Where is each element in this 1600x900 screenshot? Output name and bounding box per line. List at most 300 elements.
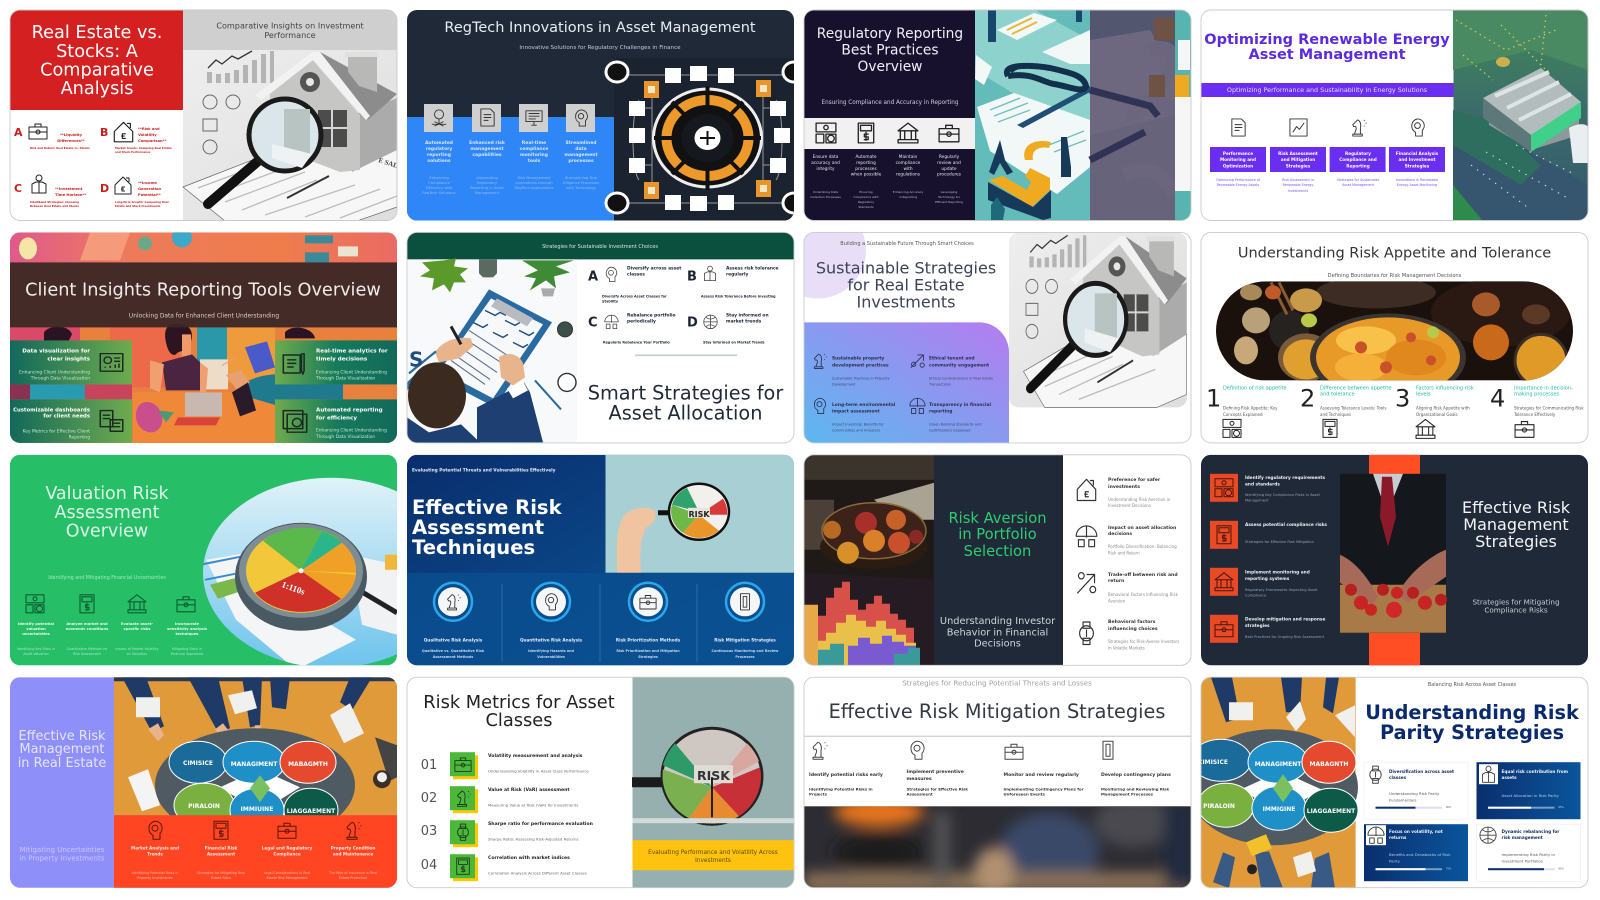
- step 3: 3: [1395, 384, 1410, 412]
- item 1: Understanding Risk Aversion in: [1108, 497, 1171, 502]
- item A: Risk and Return: Real Estate vs. Stocks: [30, 146, 90, 150]
- notes: Strategies for Sustainable: [1337, 178, 1379, 182]
- title: Best Practices: [841, 42, 939, 58]
- title: Stocks: A: [56, 42, 138, 62]
- item 2: decisions: [1108, 531, 1132, 537]
- title: Analysis: [61, 79, 133, 99]
- column 2: Identifying Hazards and: [528, 649, 575, 653]
- item C: Rebalance portfolio: [627, 312, 676, 318]
- box labels: Financial Analysis: [1396, 151, 1439, 156]
- box labels: Reporting: [1346, 164, 1370, 168]
- tile 1: Fundamentals: [1389, 798, 1416, 803]
- step 1: Projects: [809, 792, 828, 797]
- item A: Stability: [602, 299, 619, 303]
- column headings: Property Condition: [331, 846, 375, 851]
- column 2: capabilities: [472, 152, 502, 158]
- box: automated reporting: [275, 399, 397, 443]
- column 3: [515, 104, 554, 190]
- meeting table photo: CIMISICE: [183, 760, 213, 767]
- column 4: Risk Mitigation Strategies: [714, 637, 776, 642]
- column headings: Trends: [147, 852, 163, 857]
- column 3: Risk Prioritization Methods: [616, 637, 681, 642]
- column notes: on Valuation: [127, 652, 147, 656]
- card: Sustainable Strategies for Real Estate: [770, 202, 1191, 443]
- magnifier illustration: [200, 475, 400, 670]
- dark title band: [10, 262, 397, 327]
- icons: [149, 821, 361, 839]
- subtitle: Mitigating Uncertainties: [20, 845, 105, 854]
- step 3: Aligning Risk Appetite with: [1416, 405, 1470, 410]
- box labels: Monitoring and: [1220, 157, 1256, 162]
- icons: [26, 595, 195, 613]
- step 4: Monitoring and Reviewing Risk: [1101, 787, 1170, 792]
- tile 1: Understanding Risk Parity: [1389, 791, 1440, 796]
- tile 4: risk management: [1502, 835, 1543, 840]
- column 3: [616, 583, 681, 659]
- item D: Stay Informed on Market Trends: [703, 340, 765, 344]
- column 3: compliance: [520, 146, 548, 152]
- step 4: 4: [1490, 384, 1505, 412]
- box: customizable dashboards: Reporting: [69, 434, 90, 440]
- card: Effective Risk Assessment Techniques: [407, 455, 794, 666]
- step 3: [1004, 744, 1084, 797]
- column headings: integrity: [816, 166, 835, 172]
- subtitle: Decisions: [974, 638, 1021, 649]
- column notes: Identifying Potential Risks in: [132, 871, 178, 875]
- box labels: Optimization: [1223, 164, 1253, 168]
- column notes: Risk Assessment: [73, 652, 102, 656]
- column notes: Underlining Data: [813, 190, 838, 194]
- column notes: Regulatory: [858, 200, 874, 204]
- tile 3: Parity: [1389, 859, 1401, 864]
- step 2: Assessing Tolerance Levels: Tools: [1320, 405, 1386, 410]
- subtitle: Evaluating Potential Threats and Vulnerabilities Effectively: [412, 467, 556, 473]
- row 02: Measuring Value at Risk (VaR) for Investments: [488, 803, 578, 808]
- item D: **Income: [138, 181, 157, 185]
- card: Valuation Risk Assessment: [10, 455, 400, 670]
- item 3: [1077, 572, 1179, 603]
- title: Understanding Risk Appetite and Tolerance: [1238, 245, 1551, 261]
- item D: [100, 177, 169, 208]
- tile 2: Asset Allocation in Risk Parity: [1502, 793, 1560, 798]
- column 2: management: [470, 146, 505, 152]
- orange strip: [1369, 455, 1420, 666]
- step 3: Unforeseen Events: [1004, 792, 1046, 797]
- row 02: Value at Risk (VaR) assessment: [488, 787, 570, 793]
- title: Techniques: [412, 536, 535, 559]
- item A: A: [14, 126, 23, 139]
- box: data visualization: Data visualization for: [22, 348, 90, 354]
- step 4: [1101, 741, 1171, 797]
- item 1: Identify regulatory requirements: [1245, 475, 1325, 481]
- item 3: [1210, 568, 1318, 597]
- title: Asset Management: [1248, 47, 1406, 63]
- tile 3: Benefits and Drawbacks of Risk: [1389, 852, 1451, 857]
- tile 2: assets: [1502, 775, 1517, 780]
- risk gauge photo: RISK: [697, 768, 731, 783]
- column 2: Automating: [476, 176, 498, 180]
- magnifier illustration: 1:110s: [280, 579, 307, 597]
- box: real-time analytics: timely decisions: [316, 356, 368, 362]
- column headings: processes: [855, 166, 877, 172]
- purple boxes: [1210, 147, 1445, 172]
- column notes: Quantitative Methods for: [66, 647, 108, 651]
- risk photo: [606, 455, 794, 573]
- meeting table photo: CIMISICE: [1198, 759, 1228, 766]
- item 1: Identifying Key Compliance Risks in Asset: [1245, 493, 1321, 497]
- item A: [14, 124, 90, 150]
- item A: [588, 265, 681, 303]
- title: Overview: [66, 521, 148, 541]
- box: real-time analytics: Through Data Visualization: [315, 375, 375, 381]
- yellow callout: Investments: [695, 858, 731, 864]
- notes: Energy Asset Monitoring: [1397, 183, 1437, 187]
- column notes: Property Investments: [137, 876, 173, 880]
- column 1: regulatory: [426, 146, 452, 152]
- column headings: specific risks: [124, 627, 151, 631]
- column 1: Enhancing: [429, 176, 449, 180]
- item 2: Risk and Return: [1108, 550, 1140, 555]
- item D: D: [687, 315, 698, 330]
- suit photo: [1340, 474, 1447, 633]
- card: Understanding Risk Parity Strategies: [1188, 677, 1588, 888]
- title: Selection: [964, 543, 1031, 560]
- column headings: valuation: [26, 627, 46, 631]
- item 3: Regulatory Frameworks Impacting Asset: [1245, 588, 1318, 592]
- step 4: Develop contingency plans: [1101, 772, 1171, 778]
- title: Optimizing Renewable Energy: [1204, 32, 1450, 48]
- item C: C: [14, 182, 22, 195]
- column headings: Ensure data: [813, 154, 839, 160]
- item 1: Investment Decisions: [1108, 503, 1151, 508]
- dark centre panel: [934, 455, 1063, 666]
- title: Effective Risk: [18, 729, 106, 744]
- item C: periodically: [627, 318, 656, 324]
- tile 2: [1476, 762, 1580, 819]
- item A: classes: [627, 271, 645, 277]
- risk gauge photo: [632, 677, 794, 888]
- notes: [1216, 178, 1438, 192]
- item C: Regularly Rebalance Your Portfolio: [603, 340, 670, 344]
- column 3: Real-time: [522, 140, 546, 146]
- column 1: Efficiency with: [426, 186, 453, 190]
- notes: Renewable Energy: [1283, 183, 1313, 187]
- step 1: Identify potential risks early: [809, 772, 883, 778]
- step 3: Organizational Goals: [1416, 412, 1458, 417]
- icon strip: [804, 118, 975, 149]
- column notes: Estate Risk Management: [266, 876, 308, 880]
- row 03: Sharpe Ratio: Assessing Risk-Adjusted Returns: [488, 837, 579, 842]
- panel item 2: [911, 355, 993, 386]
- meeting table photo: PIRALOIN: [1203, 803, 1235, 810]
- row 02: [421, 786, 578, 813]
- subtitle: Building a Sustainable Future Through Smart Choices: [840, 241, 974, 247]
- card: Risk Aversion in Portfolio Selection: [804, 455, 1191, 666]
- box: real-time analytics: Real-time analytics for: [316, 348, 388, 354]
- column notes: The Role of Insurance in Real: [328, 871, 377, 875]
- title: in Portfolio: [958, 526, 1037, 543]
- column 4: [563, 104, 599, 190]
- item 4: strategies: [1245, 623, 1270, 629]
- column headings: review and: [937, 160, 961, 166]
- row 01: Understanding Volatility in Asset Class Performance: [488, 769, 589, 774]
- icons: [1232, 119, 1424, 136]
- item 2: [1210, 521, 1327, 549]
- column headings: Assessment: [207, 852, 235, 857]
- step 3: Monitor and review regularly: [1004, 772, 1079, 778]
- card: Understanding Risk Appetite: [1201, 232, 1588, 443]
- item D: Generation: [138, 187, 162, 191]
- box: real-time analytics: [275, 340, 397, 384]
- item 4: influencing choices: [1108, 626, 1158, 632]
- title: Real Estate vs.: [32, 23, 162, 43]
- card: Regulatory Reporting Best Practices: [804, 10, 1191, 221]
- item B: B: [100, 126, 108, 139]
- title: Regulatory Reporting: [817, 26, 963, 42]
- tile 3: [1364, 824, 1468, 881]
- title: RegTech Innovations in Asset Management: [444, 20, 756, 36]
- column headings: regulations: [896, 172, 921, 178]
- column 4: Diligence Processes: [563, 181, 599, 185]
- item B: [100, 122, 172, 154]
- item 4: Behavioral factors: [1108, 619, 1156, 625]
- column headings: Evaluate asset-: [121, 622, 153, 626]
- column 1: solutions: [427, 158, 451, 164]
- meeting table photo: LIAGGAEMENT: [1307, 808, 1356, 815]
- title: for Real Estate: [847, 275, 965, 294]
- card: Optimizing Renewable Energy: [1201, 10, 1588, 221]
- column headings: and Maintenance: [333, 852, 373, 857]
- divider: [635, 354, 737, 356]
- panel item 4: Certifications Explained: [929, 428, 970, 432]
- column headings: reporting: [856, 160, 876, 166]
- column headings: sensitivity analysis: [167, 627, 208, 631]
- house photo: E SAL: [377, 156, 399, 170]
- step 3: Factors influencing risk: [1416, 385, 1474, 391]
- step 4: making processes: [1514, 391, 1559, 397]
- column notes: [132, 871, 377, 880]
- house photo: [183, 50, 399, 221]
- column 4: management: [564, 152, 599, 158]
- colourful illustration: [10, 227, 397, 443]
- title: Risk Metrics for Asset: [423, 692, 615, 713]
- tile 4: Investment Portfolios: [1502, 859, 1543, 864]
- item D: Long-Term Growth: Comparing Real: [115, 200, 169, 204]
- column 1: Automated: [425, 140, 453, 146]
- column notes: Enhancing Accuracy: [893, 190, 923, 194]
- item 3: Aversion: [1108, 598, 1126, 603]
- red title panel: [10, 10, 183, 110]
- column notes: Identifying Key Risks in: [17, 647, 55, 651]
- box: data visualization: Enhancing Client Understanding: [19, 369, 90, 375]
- card: Effective Risk Management in Real Estate: [10, 677, 397, 888]
- step 3: [1395, 384, 1474, 438]
- column 4: Continuous Monitoring and Review: [712, 649, 779, 653]
- notes: Risk Assessment in: [1282, 178, 1314, 182]
- title: Overview: [858, 59, 922, 75]
- title: Understanding Risk: [1365, 701, 1580, 724]
- step 2: Strategies for Effective Risk: [906, 787, 968, 792]
- step 2: Difference between appetite: [1320, 385, 1391, 391]
- column headings: [131, 846, 375, 857]
- item B: and Stock Performance: [115, 150, 151, 154]
- pale stripe: [632, 818, 794, 823]
- row 04: Correlation Analysis Across Different Asset Classes: [488, 871, 587, 876]
- fruit bowl photo: [804, 455, 934, 666]
- title: Assessment: [412, 516, 544, 539]
- column headings: Identify potential: [18, 622, 54, 626]
- step 2: Assessment: [906, 792, 933, 797]
- row 01: Volatility measurement and analysis: [488, 753, 583, 759]
- isometric illustration: [975, 10, 1191, 221]
- item C: **Investment: [55, 187, 83, 191]
- panel item 4: Green Building Standards and: [929, 422, 981, 426]
- step 4: Strategies for Communicating Risk: [1514, 405, 1584, 410]
- item 4: Strategies for Risk-Averse Investors: [1108, 639, 1179, 644]
- title: Effective Risk Mitigation Strategies: [829, 700, 1165, 723]
- box labels: and Mitigation: [1281, 157, 1315, 162]
- title: Management: [1463, 515, 1569, 534]
- dividers: [502, 584, 697, 662]
- title: Assessment: [55, 503, 160, 523]
- card: Effective Risk Mitigation Strategies: [804, 677, 1194, 897]
- column headings: uncertainties: [22, 632, 51, 636]
- column 3: tools: [528, 158, 541, 164]
- item B: Market Trends: Analyzing Real Estate: [115, 146, 172, 150]
- row 04: 04: [421, 858, 437, 873]
- step 2: Implement preventive: [906, 769, 964, 775]
- risk photo: RISK: [688, 510, 710, 519]
- row 04: [421, 854, 587, 881]
- column notes: Estate Risks: [211, 876, 231, 880]
- item C: [14, 175, 86, 208]
- column 1: Assessment Methods: [433, 655, 473, 659]
- column 3: monitoring: [520, 152, 548, 158]
- column notes: Ensuring: [859, 190, 873, 194]
- column headings: Automate: [855, 154, 877, 160]
- step 2: [1300, 384, 1391, 437]
- item C: Intelliband Strategies: Choosing: [30, 200, 79, 204]
- item 3: Implement monitoring and: [1245, 569, 1310, 575]
- step 1: Defining Risk Appetite: Key: [1223, 405, 1278, 410]
- column 1: RegTech Solutions: [422, 191, 456, 195]
- yellow callout: Evaluating Performance and Volatility Across: [648, 850, 778, 856]
- tile 4: [1476, 824, 1580, 881]
- panel item 3: Long-term environmental: [832, 402, 896, 408]
- subtitle: Balancing Risk Across Asset Classes: [1428, 682, 1517, 688]
- panel item 4: reporting: [929, 408, 952, 414]
- meeting table photo: LIAGGAEMENT: [287, 808, 336, 815]
- box: data visualization: [10, 340, 132, 384]
- item 3: Trade-off between risk and: [1108, 572, 1178, 578]
- item 1: [1077, 477, 1171, 508]
- item D: market trends: [726, 318, 762, 324]
- item A: Diversify across asset: [627, 265, 681, 271]
- item 4: [1080, 619, 1179, 650]
- box: real-time analytics: Enhancing Client Understanding: [316, 369, 387, 375]
- column notes: Asset Valuation: [23, 652, 49, 656]
- item 3: Behavioral Factors Influencing Risk: [1108, 592, 1179, 597]
- blurred photo: [804, 797, 1194, 897]
- column 3: Risk Prioritization and Mitigation: [616, 649, 680, 653]
- tile 3: Focus on volatility, not: [1389, 829, 1443, 834]
- photo: man with clipboard: [407, 258, 577, 443]
- column 4: Streamlining Due: [565, 176, 598, 180]
- column 3: Innovations through: [515, 181, 553, 185]
- box labels: Regulatory: [1345, 151, 1371, 156]
- subtitle: Comparative Insights on Investment: [216, 20, 364, 30]
- column headings: update: [941, 166, 957, 172]
- panel item 3: Impact Investing: Benefits for: [832, 422, 884, 426]
- item 4: Develop mitigation and response: [1245, 616, 1325, 622]
- title: in Real Estate: [18, 756, 106, 771]
- purple band: [1201, 83, 1454, 97]
- card: Effective Risk Management Strategies: [1201, 455, 1588, 666]
- title: Smart Strategies for: [588, 381, 783, 404]
- column 2: [469, 104, 506, 195]
- step 1: [1206, 384, 1287, 437]
- item 3: reporting systems: [1245, 576, 1290, 582]
- column 3: Risk Management: [517, 176, 551, 180]
- column notes: Mitigating Risks in: [172, 647, 202, 651]
- column notes: [810, 191, 963, 208]
- subtitle: in Property Investments: [20, 854, 105, 863]
- panel item 1: Sustainable property: [832, 355, 884, 361]
- meeting table photo: PIRALOIN: [188, 803, 220, 810]
- row 01: [421, 752, 589, 779]
- column headings: with: [903, 166, 913, 172]
- photo: man with clipboard: S: [409, 347, 423, 371]
- panel item 2: Ethical Considerations in Real Estate: [929, 376, 993, 380]
- panel item 1: Development: [832, 382, 856, 386]
- notes: Renewable Energy Assets: [1217, 183, 1259, 187]
- tile 4: Dynamic rebalancing for: [1502, 829, 1560, 834]
- column headings: Financial Risk: [205, 846, 238, 851]
- tile 1: classes: [1389, 775, 1407, 780]
- row 04: Correlation with market indices: [488, 855, 570, 861]
- box: customizable dashboards: [10, 399, 132, 443]
- title: Valuation Risk: [45, 484, 170, 504]
- column 4: data: [575, 146, 587, 152]
- title: Risk Aversion: [948, 510, 1047, 527]
- tile 3: returns: [1389, 835, 1407, 840]
- column 1: [422, 104, 456, 195]
- bottom band: [407, 573, 794, 666]
- item A: A: [588, 269, 598, 284]
- column 2: Quantitative Risk Analysis: [520, 637, 583, 642]
- box: automated reporting: Enhancing Client Understanding: [316, 427, 387, 433]
- step 1: Identifying Potential Risks in: [809, 787, 873, 792]
- box: customizable dashboards: for client needs: [43, 413, 90, 419]
- panel item 3: [814, 398, 896, 432]
- box labels: [1220, 151, 1439, 168]
- card: Risk Metrics for Asset Classes: [407, 677, 794, 888]
- food photo pill: [1216, 276, 1573, 401]
- column notes: Efficient Reporting: [935, 200, 963, 204]
- title: Effective Risk: [1462, 498, 1571, 517]
- orange panel: [114, 815, 397, 888]
- subtitle: Identifying and Mitigating Financial Uncertainties: [48, 575, 166, 581]
- row 02: 02: [421, 791, 437, 806]
- item 2: Assess potential compliance risks: [1245, 522, 1327, 528]
- item B: regularly: [726, 271, 749, 277]
- house photo: [1009, 232, 1187, 407]
- column notes: Estate Protection: [339, 876, 367, 880]
- meeting table photo: MANAGIMENT: [1255, 761, 1302, 768]
- column 2: Enhanced risk: [469, 140, 506, 146]
- notes: Investments: [1288, 189, 1308, 193]
- column notes: Impact of Market Volatility: [115, 647, 159, 651]
